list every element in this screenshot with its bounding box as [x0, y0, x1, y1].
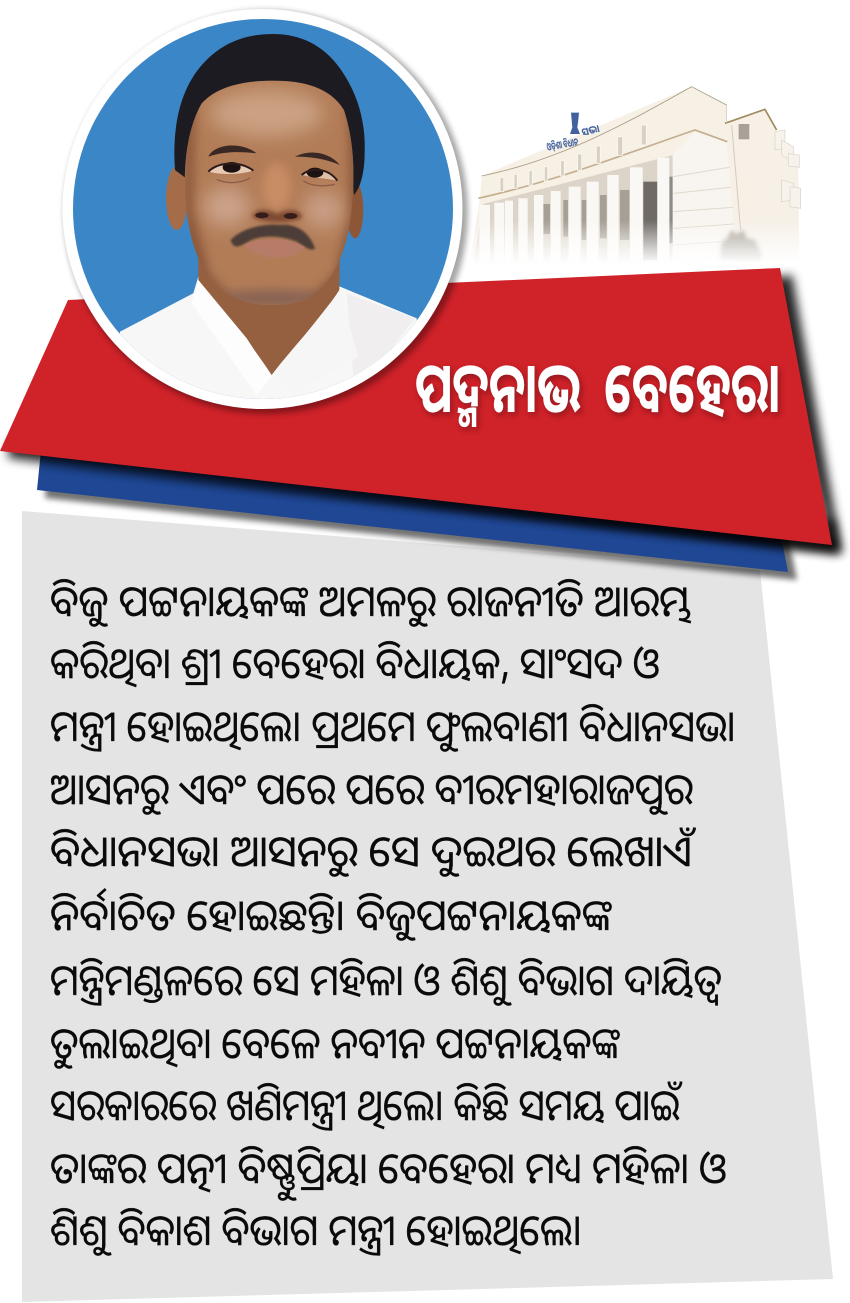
right edge shade: [314, 115, 354, 294]
body text: ମନ୍ତ୍ରିମଣ୍ଡଳରେ ସେ ମହିଳା ଓ ଶିଶୁ ବିଭାଗ ଦାୟିତ୍ୱ: [50, 949, 722, 1008]
bottom fade: [460, 220, 807, 265]
portrait: [60, 9, 470, 427]
body text: ନିର୍ବାଚିତ ହୋଇଛନ୍ତି। ବିଜୁପଟ୍ଟନାୟକଙ୍କ: [50, 884, 612, 943]
body text: ସରକାରରେ ଖଣିମନ୍ତ୍ରୀ ଥିଲେ। କିଛି ସମୟ ପାଇଁ: [50, 1074, 683, 1133]
emblem and sign: [546, 113, 601, 155]
photo: [73, 19, 453, 399]
lattice window: [739, 124, 749, 139]
body text: ଶିଶୁ ବିକାଶ ବିଭାଗ ମନ୍ତ୍ରୀ ହୋଇଥିଲେ।: [50, 1199, 582, 1258]
body text: ବିଧାନସଭା ଆସନରୁ ସେ ଦୁଇଥର ଲେଖାଏଁ: [50, 820, 696, 879]
parapet windows: [500, 125, 646, 192]
emblem and sign: ଓଡ଼ିଶା ବିଧାନ: [546, 135, 580, 155]
red banner: [0, 268, 842, 554]
name text: ପଦ୍ମନାଭ: [415, 337, 581, 433]
palm tree: [720, 230, 762, 262]
ears: [166, 167, 187, 230]
brows: [208, 146, 257, 157]
face: [180, 77, 360, 310]
neck: [198, 258, 340, 375]
name shadow: [417, 340, 782, 436]
colonnade: [473, 155, 673, 263]
grey text panel: [22, 511, 833, 1302]
body text: [50, 570, 735, 1258]
parliament building: [460, 87, 850, 283]
name text: [415, 337, 780, 433]
body text: ତୁଲାଇଥିବା ବେଳେ ନବୀନ ପଟ୍ଟନାୟକଙ୍କ: [50, 1012, 620, 1071]
hair: [174, 34, 365, 195]
right eye: [302, 168, 337, 181]
cheek lights: [203, 187, 250, 227]
shirt: [120, 276, 417, 399]
nose light: [263, 163, 291, 210]
body text: ତାଙ୍କର ପତ୍ନୀ ବିଷ୍ଣୁପ୍ରିୟା ବେହେରା ମଧ୍ୟ ମହିଳା ଓ: [50, 1137, 727, 1201]
lips: [244, 239, 305, 258]
name heading: [415, 337, 782, 436]
eyes: [208, 162, 253, 174]
blue ribbon: [37, 440, 797, 580]
moustache: [231, 225, 315, 250]
body text: କରିଥିବା ଶ୍ରୀ ବେହେରା ବିଧାୟକ, ସାଂସଦ ଓ: [50, 632, 660, 691]
emblem and sign: ସଭା: [580, 122, 601, 140]
right wing wall: [725, 109, 799, 262]
body text: ବିଜୁ ପଟ୍ଟନାୟକଙ୍କ ଅମଳରୁ ରାଜନୀତି ଆରମ୍ଭ: [50, 570, 692, 629]
name shadow: ପଦ୍ମନାଭ: [417, 340, 583, 436]
cornice lines: [478, 130, 727, 198]
nose: [252, 210, 303, 222]
corner pier: [673, 132, 737, 263]
forehead light: [210, 90, 323, 137]
left edge shade: [184, 112, 229, 294]
main wing wall: [470, 87, 727, 260]
body text: ଆସନରୁ ଏବଂ ପରେ ପରେ ବୀରମହାରାଜପୁର: [50, 758, 693, 817]
body text: ମନ୍ତ୍ରୀ ହୋଇଥିଲେ। ପ୍ରଥମେ ଫୁଲବାଣୀ ବିଧାନସଭା: [50, 695, 735, 754]
jaw shade: [227, 286, 316, 305]
side balconies: [775, 130, 801, 208]
